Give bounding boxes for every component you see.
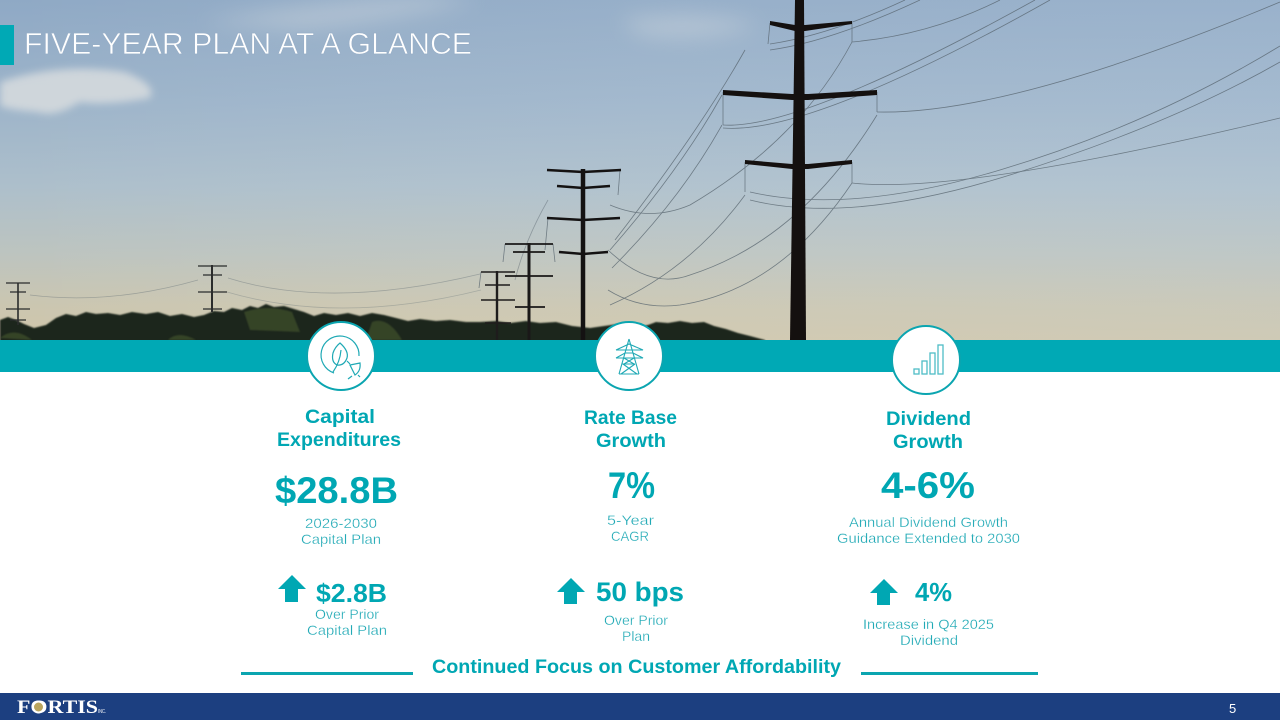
pylon 1 (723, 0, 877, 340)
heading: Growth (893, 431, 963, 453)
icon: leaf and plug (307, 322, 375, 390)
icon: up arrow (557, 578, 585, 604)
logo: Fortis: INC. (98, 709, 106, 715)
pylon 2 (547, 169, 621, 340)
heading: Rate Base (584, 407, 677, 429)
tree line (0, 304, 765, 345)
description: Capital Plan (301, 531, 381, 547)
column: rate base growth (557, 407, 684, 644)
distant pylon 6 (6, 283, 30, 325)
increase value: $2.8B (316, 578, 387, 608)
pylon 3 (505, 243, 553, 340)
photo: transmission lines at dusk (0, 0, 1280, 345)
pylon 4 (481, 271, 515, 340)
description: 2026-2030 (305, 515, 377, 531)
heading: Expenditures (277, 429, 401, 451)
logo: Fortis: FORTIS (17, 697, 98, 718)
increase note: Plan (622, 628, 650, 644)
increase note: Increase in Q4 2025 (863, 616, 994, 632)
increase note: Dividend (900, 632, 958, 648)
page number: 5 (1229, 701, 1236, 716)
heading (277, 406, 401, 451)
increase note (863, 616, 994, 648)
teal band (0, 340, 1280, 372)
callout: customer affordability (241, 657, 1038, 678)
callout: customer affordability: Continued Focus on Customer Affordability (432, 657, 841, 678)
distant pylon 5 (198, 265, 227, 312)
title: FIVE-YEAR PLAN AT A GLANCE (24, 26, 472, 61)
description (301, 515, 381, 547)
value: $28.8B (275, 470, 398, 511)
column: dividend growth (837, 408, 1020, 648)
description (607, 512, 654, 544)
heading: Dividend (886, 408, 971, 430)
value: 4-6% (881, 465, 975, 506)
heading (584, 407, 677, 452)
icon: transmission tower (595, 322, 663, 390)
heading: Capital (305, 406, 375, 428)
increase note: Capital Plan (307, 622, 387, 638)
description: Guidance Extended to 2030 (837, 530, 1020, 546)
heading (886, 408, 971, 453)
increase value: 50 bps (596, 577, 684, 607)
heading: Growth (596, 430, 666, 452)
description: CAGR (611, 528, 649, 544)
icon: rising bars (892, 326, 960, 394)
increase note (604, 612, 668, 644)
description: Annual Dividend Growth (849, 514, 1008, 530)
increase note: Over Prior (604, 612, 668, 628)
description (837, 514, 1020, 546)
increase note: Over Prior (315, 606, 379, 622)
increase value: 4% (915, 577, 952, 607)
icon: up arrow (278, 575, 306, 602)
title accent bar (0, 25, 14, 65)
increase note (307, 606, 387, 638)
footer bar (0, 693, 1280, 720)
description: 5-Year (607, 512, 654, 528)
icon: up arrow (870, 579, 898, 605)
value: 7% (608, 465, 655, 506)
column: capital expenditures (275, 406, 401, 638)
